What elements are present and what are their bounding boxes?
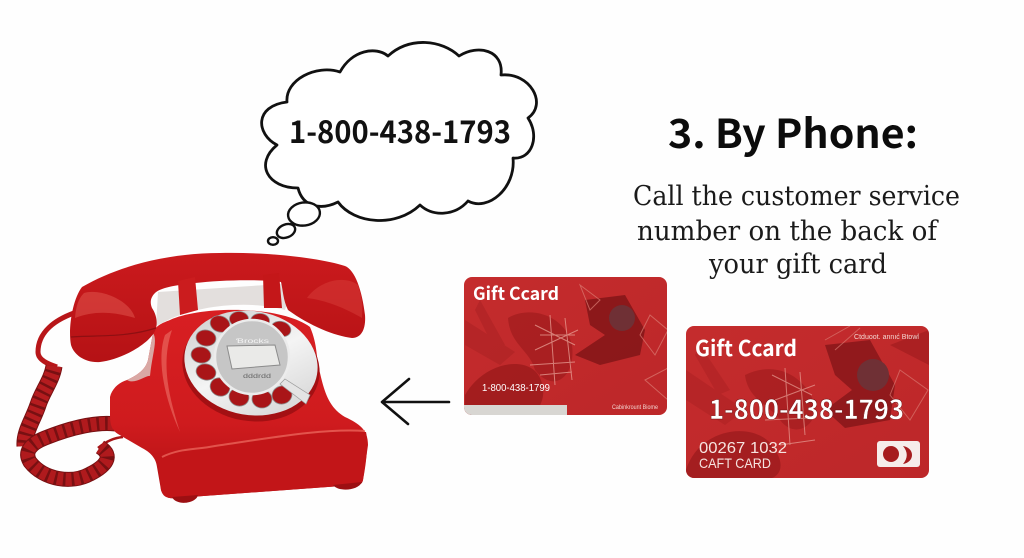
small card caption: Cabinkrount Biome (612, 404, 658, 411)
arrow pointing to phone (382, 379, 449, 424)
card type: CAFT CARD (699, 455, 771, 471)
instruction text: Call the customer service (633, 181, 960, 212)
base front face shade (158, 431, 367, 498)
feet (172, 495, 198, 503)
rotary dial: dddrdd (243, 374, 271, 380)
instruction text: your gift card (708, 249, 887, 280)
telephone body (110, 310, 368, 498)
infographic canvas (16, 41, 959, 503)
small card number: 1-800-438-1799 (482, 382, 550, 394)
highlights (161, 330, 180, 432)
large gift card (686, 326, 929, 478)
large card number: 1-800-438-1793 (709, 388, 904, 427)
body left shadow (127, 333, 155, 381)
telephone (25, 253, 368, 503)
thought circles (268, 200, 321, 245)
heading: 3. By Phone: (668, 102, 918, 160)
dial labels: Ɓrocks (236, 339, 269, 345)
large card caption: Ctduoot. annıć Btowl (854, 334, 919, 341)
center plate (215, 320, 289, 394)
earpiece shine (75, 292, 135, 318)
finger stop (280, 379, 310, 404)
instruction text (633, 181, 960, 280)
grey strip (464, 405, 567, 415)
instruction text: number on the back of (637, 216, 939, 247)
thought bubble (262, 42, 536, 245)
handset (70, 253, 365, 362)
bubble phone number: 1-800-438-1793 (289, 107, 511, 152)
finger holes (190, 312, 294, 408)
rotary dial (174, 300, 328, 432)
small gift card (464, 277, 668, 416)
large card title: Gift Ccard (695, 332, 797, 363)
cradle back (156, 284, 288, 326)
card logo (877, 441, 920, 467)
cradle prongs (178, 277, 198, 315)
account number: 00267 1032 (699, 440, 787, 457)
curly cord (25, 313, 123, 479)
cloud outline (262, 42, 536, 220)
small card title: Gift Ccard (473, 280, 559, 306)
display (227, 345, 280, 369)
